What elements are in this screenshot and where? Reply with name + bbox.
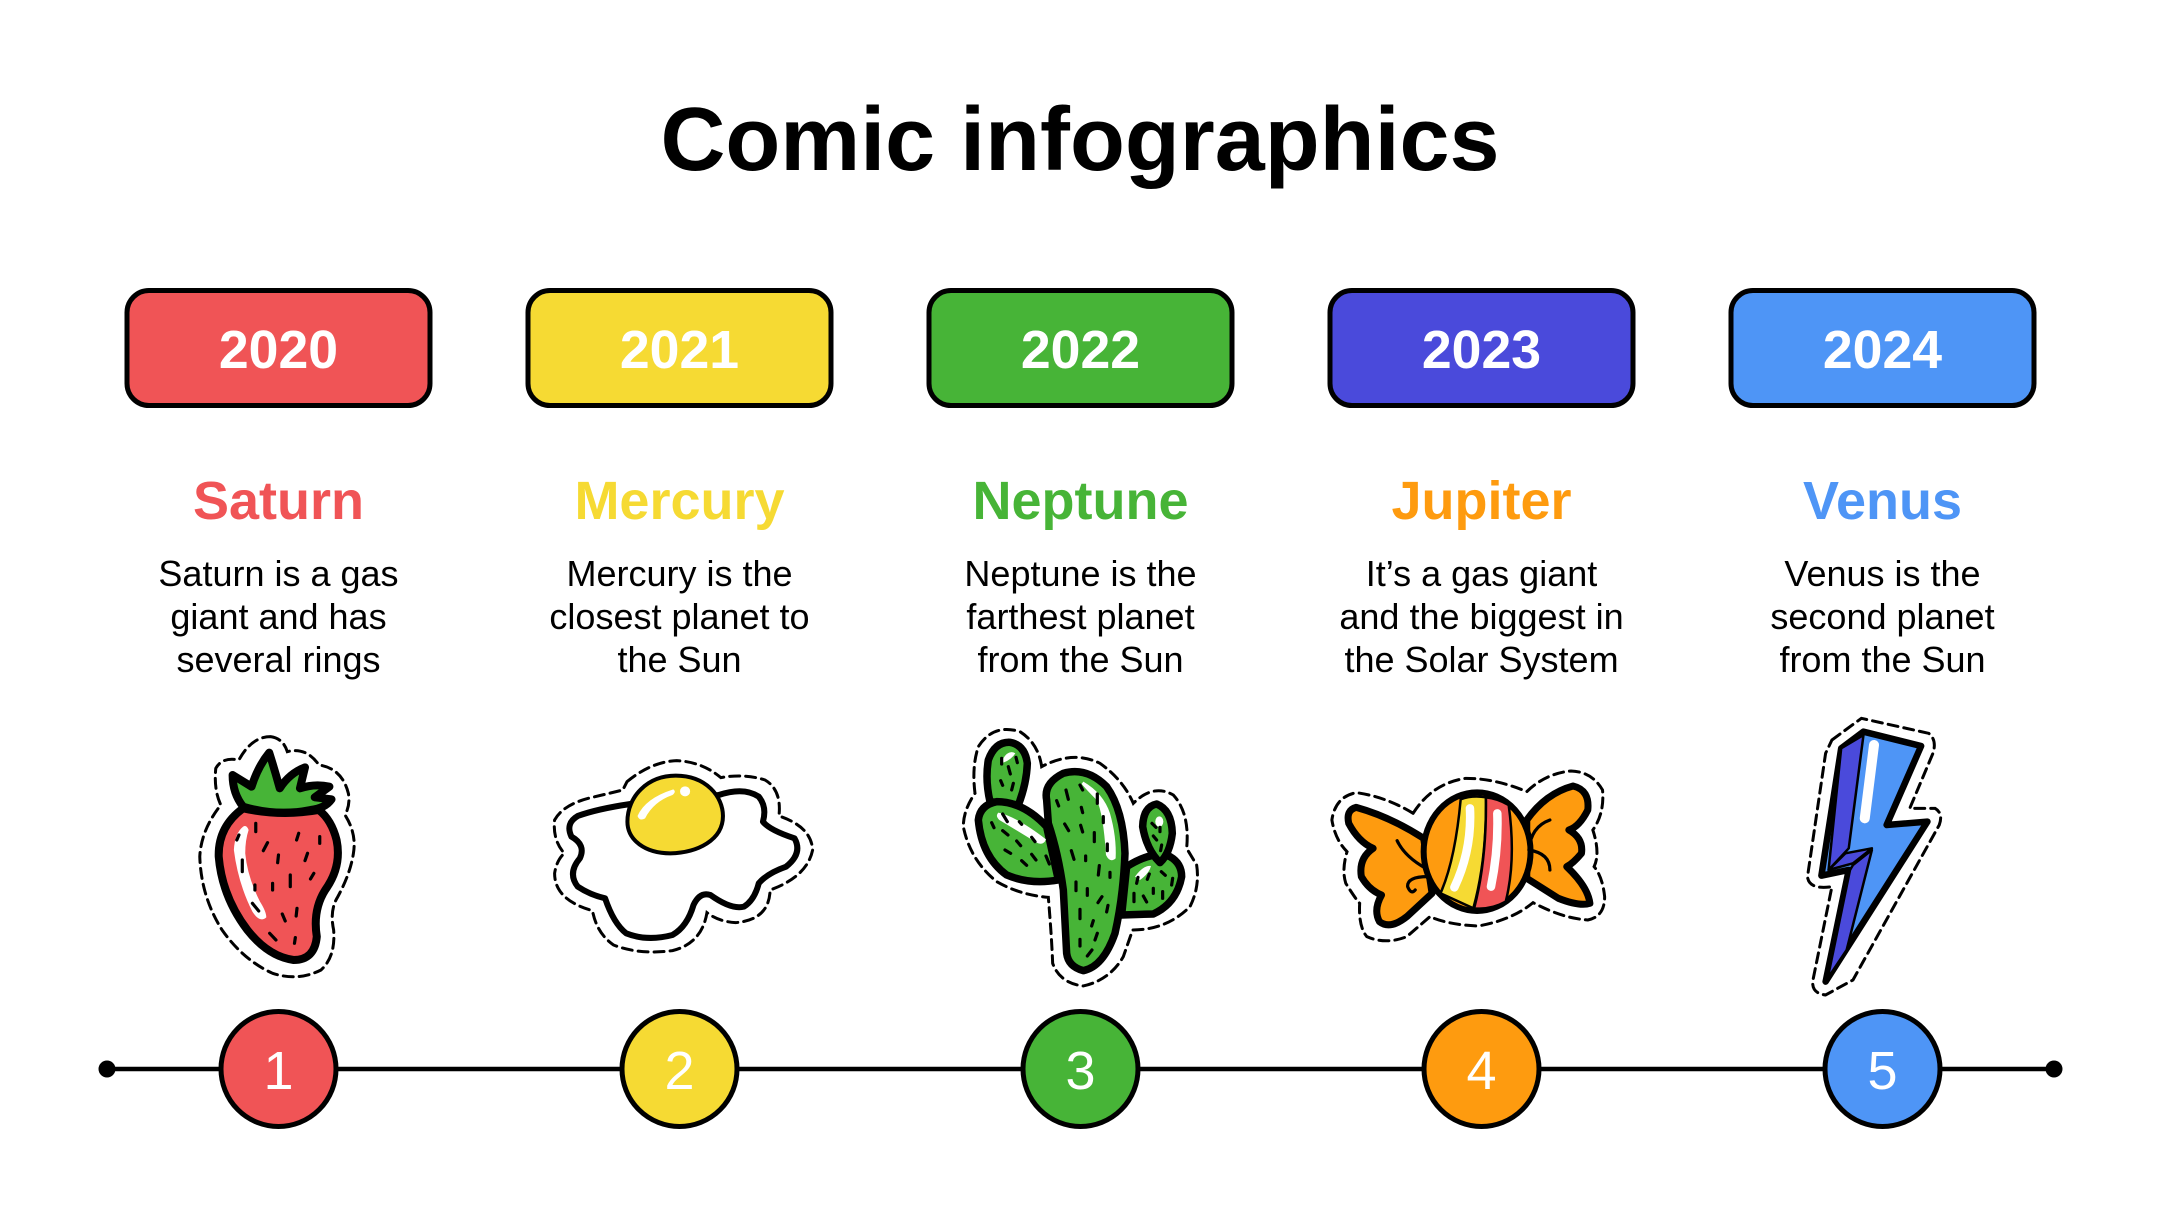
marker 2	[622, 1012, 737, 1126]
title: Comic infographics	[660, 90, 1500, 190]
icon: lightning bolt	[1808, 718, 1941, 995]
icon: cactus	[963, 729, 1197, 986]
marker 1	[221, 1012, 336, 1126]
marker 4	[1424, 1012, 1539, 1126]
heading Neptune: Neptune	[972, 471, 1188, 531]
year badge 2022: 2022	[1021, 320, 1140, 380]
icon: fried egg	[554, 761, 813, 952]
year badge 2020	[127, 290, 430, 406]
start dot	[98, 1060, 116, 1078]
year badge 2020: 2020	[219, 320, 338, 380]
panel: 2021 Mercury	[528, 290, 831, 680]
marker 1: 1	[263, 1041, 294, 1101]
description Venus: Venus is the	[1784, 553, 1981, 594]
description Jupiter: and the biggest in	[1339, 596, 1624, 637]
description Saturn: giant and has	[170, 596, 387, 637]
panel: 2024 Venus	[1731, 290, 2034, 680]
marker 3: 3	[1065, 1041, 1096, 1101]
panel: 2022 Neptune	[929, 290, 1232, 680]
end dot	[2046, 1060, 2062, 1078]
year badge 2022	[929, 290, 1232, 406]
description Mercury: closest planet to	[549, 596, 810, 637]
description Mercury: the Sun	[617, 639, 742, 680]
marker 5	[1825, 1012, 1940, 1126]
timeline axis	[98, 1060, 2062, 1078]
marker 2: 2	[664, 1041, 695, 1101]
year badge 2024	[1731, 290, 2034, 406]
description Saturn: Saturn is a gas	[158, 553, 399, 594]
marker 4: 4	[1466, 1041, 1497, 1101]
description Jupiter: It’s a gas giant	[1366, 553, 1597, 594]
year badge 2023: 2023	[1422, 320, 1541, 380]
heading Venus: Venus	[1803, 471, 1962, 531]
description Mercury: Mercury is the	[566, 553, 793, 594]
year badge 2024: 2024	[1823, 320, 1942, 380]
marker 3	[1023, 1012, 1138, 1126]
marker 5: 5	[1867, 1041, 1898, 1101]
icon: candy	[1332, 771, 1605, 941]
panel: 2020 Saturn	[127, 290, 430, 680]
year badge 2021	[528, 290, 831, 406]
panel: 2023 Jupiter	[1330, 290, 1633, 680]
description Saturn: several rings	[176, 639, 381, 680]
description Neptune: Neptune is the	[964, 553, 1197, 594]
heading Mercury: Mercury	[574, 471, 785, 531]
description Neptune: farthest planet	[966, 596, 1195, 637]
heading Jupiter: Jupiter	[1391, 471, 1572, 531]
description Venus: second planet	[1770, 596, 1995, 637]
year badge 2021: 2021	[620, 320, 739, 380]
heading Saturn: Saturn	[193, 471, 364, 531]
year badge 2023	[1330, 290, 1633, 406]
description Venus: from the Sun	[1779, 639, 1986, 680]
description Jupiter: the Solar System	[1344, 639, 1619, 680]
description Neptune: from the Sun	[977, 639, 1184, 680]
icon: strawberry	[200, 737, 354, 977]
